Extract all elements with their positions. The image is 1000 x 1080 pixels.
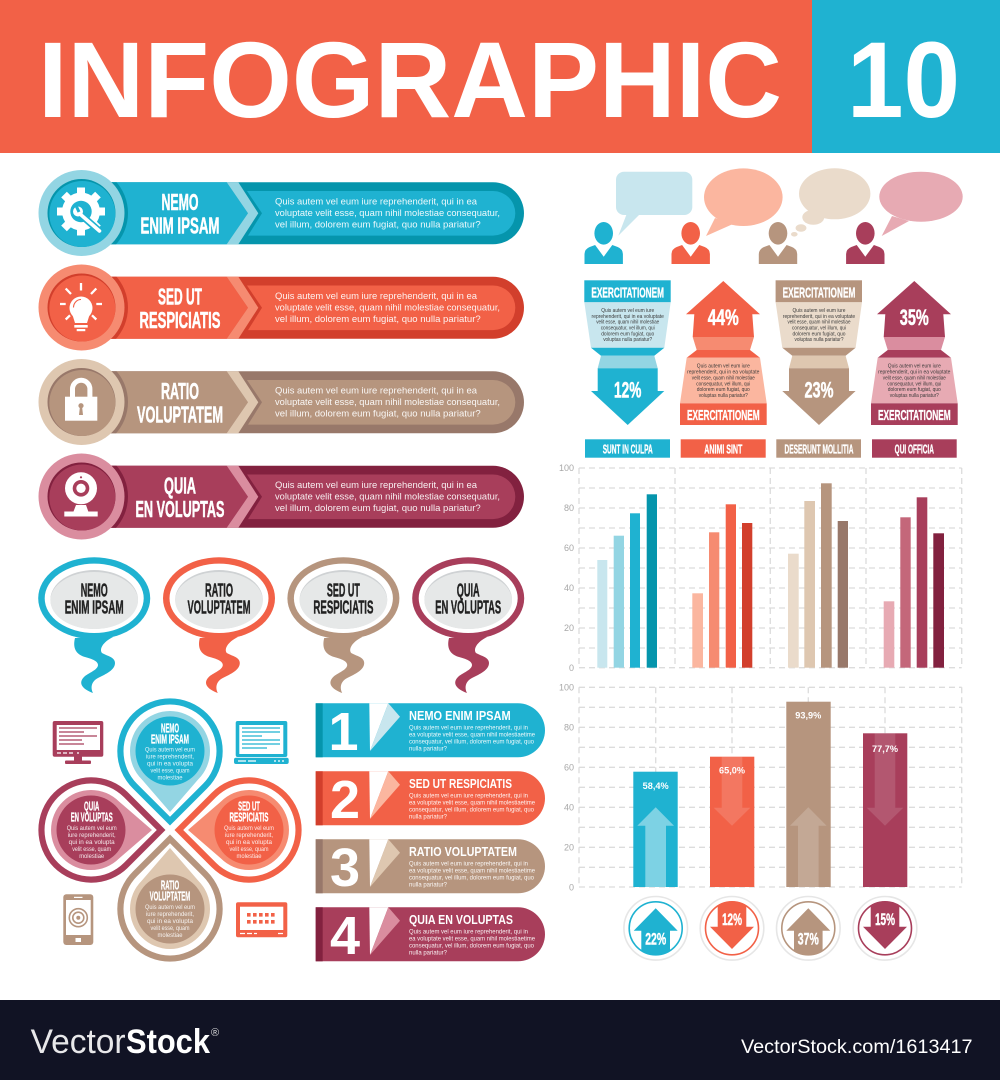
panel: funnel arrow teal 12%: voluptas nulla pariatur? [603,337,652,343]
panel: funnel arrow tan 23%: dolorem eum fugiat, quo [792,331,846,337]
bar chart: single bars with arrows: 20 [564,842,574,852]
panel: numbered ribbon 4: Quis autem vel eum iure reprehenderit, qui in [409,928,528,936]
panel: numbered ribbon 1: NEMO ENIM IPSAM [409,709,511,723]
panel: funnel arrow tan 23%: 23% [804,377,834,402]
callout: speech balloon quia en voluptas: QUIA [457,580,480,600]
panel: funnel arrow tan 23%: EXERCITATIONEM [783,285,855,301]
panel: numbered ribbon 2: nulla pariatur? [409,814,447,820]
panel: funnel arrow coral 44% [680,281,767,425]
panel: left drop quia en voluptas: velit esse, quam [72,846,111,853]
callout: speech balloon nemo enim ipsam: NEMO [81,580,108,600]
icon: badge up 22%: 22% [645,929,666,948]
number badge: 10: 10 [847,19,960,140]
callout: speech balloon ratio voluptatem: RATIO [205,580,233,600]
banner text [275,385,500,420]
banner heading: QUIA [164,472,196,498]
panel: bottom drop ratio voluptatem: velit esse, quam [150,925,190,932]
banner text: voluptate velit esse, quam nihil molestiae consequatur, [275,208,500,219]
title banner: INFOGRAPHIC [38,19,782,140]
panel: banner 1 nemo enim ipsam: ENIM IPSAM [140,212,220,238]
bar: 65,0%: 65,0% [719,766,745,776]
panel: numbered ribbon 4: nulla pariatur? [409,950,447,956]
icon: person tan with thought bubble [759,168,870,264]
bar chart: single bars with arrows: 60 [564,762,574,772]
footer bar: VectorStock.com/1613417 [741,1037,973,1058]
bar chart: grouped bars: 80 [564,503,574,513]
panel: banner 2 sed ut respiciatis: RESPICIATIS [140,307,220,333]
label: sunt in culpa: SUNT IN CULPA [603,442,653,456]
callout: speech balloon sed ut respiciatis: SED UT [327,580,360,600]
panel: numbered ribbon 3: Quis autem vel eum iure reprehenderit, qui in [409,860,528,868]
panel: numbered ribbon 1: Quis autem vel eum iure reprehenderit, qui in [409,724,528,732]
bar: 77,7%: 77,7% [872,744,898,754]
icon: badge down 15% [853,896,917,960]
panel: numbered ribbon 2 [316,770,545,830]
panel: banner 2 sed ut respiciatis [34,260,524,354]
banner text [275,196,500,231]
panel: banner 4 quia en voluptas: EN VOLUPTAS [136,496,224,522]
panel: funnel arrow coral 44%: dolorem eum fugiat, quo [697,387,750,393]
panel: right drop sed ut respiciatis: SED UT [238,800,260,814]
panel: funnel arrow plum 35%: voluptas nulla pariatur? [890,393,939,399]
panel: bottom drop ratio voluptatem [117,834,223,962]
banner text: Quis autem vel eum iure reprehenderit, qui in ea [275,291,478,302]
icon: laptop [234,721,289,764]
label: qui officia: QUI OFFICIA [895,442,934,456]
bar: 58,4%: 58,4% [643,781,669,791]
panel: banner 3 ratio voluptatem: VOLUPTATEM [137,401,223,427]
banner text: vel illum, dolorem eum fugiat, quo nulla pariatur? [275,220,481,231]
panel: right drop sed ut respiciatis: Quis autem vel eum [224,825,274,832]
panel: flower diagram [38,698,302,962]
panel: numbered ribbon 3: 3 [330,838,360,898]
panel: funnel arrow coral 44%: reprehenderit, qui in ea voluptate [687,370,759,376]
label: qui officia [872,439,957,458]
panel: numbered ribbon 2: SED UT RESPICIATIS [409,777,512,791]
panel: funnel arrow teal 12%: 12% [614,377,641,402]
footer bar: Vector [31,1023,126,1061]
panel: banner 4 quia en voluptas [34,450,524,544]
panel: funnel arrow plum 35%: velit esse, quam nihil molestiae [883,375,946,381]
panel: right drop sed ut respiciatis: velit esse, quam [230,846,268,853]
panel: left drop quia en voluptas: EN VOLUPTAS [71,811,113,825]
panel: top drop nemo enim ipsam: velit esse, quam [150,768,190,774]
panel: funnel arrow tan 23%: reprehenderit, qui in ea voluptate [783,314,855,320]
panel: left drop quia en voluptas: qui in ea volupta [69,839,115,846]
panel: top drop nemo enim ipsam: molestiae [158,774,183,782]
panel: right drop sed ut respiciatis: molestiae [236,853,262,860]
panel: numbered ribbon 2: 2 [330,770,360,830]
panel: bottom drop ratio voluptatem: VOLUPTATEM [150,890,190,904]
panel: numbered ribbon 1: consequatur, vel illum, dolorem eum fugiat, quo [409,738,534,746]
panel: funnel arrow tan 23%: consequatur, vel illum, qui [792,326,846,332]
panel: numbered ribbon 1: ea voluptate velit esse, quam nihil molestiaetime [409,732,535,738]
bar chart: grouped bars: 40 [564,583,574,593]
panel: numbered ribbon 4 [316,906,545,966]
icon: light bulb [60,283,102,331]
callout: speech balloon sed ut respiciatis: RESPICIATIS [313,598,373,618]
panel: funnel arrow tan 23%: voluptas nulla pariatur? [794,337,844,343]
panel: bottom drop ratio voluptatem: molestiae [158,932,183,939]
panel: top drop nemo enim ipsam: iure reprehenderit, [146,754,194,760]
panel: numbered ribbon 1: 1 [328,702,359,762]
callout: speech balloon nemo enim ipsam [38,557,150,693]
panel: numbered ribbon 2: Quis autem vel eum iure reprehenderit, qui in [409,792,528,800]
panel: right drop sed ut respiciatis: qui in ea volupta [226,839,273,846]
panel: top drop nemo enim ipsam: NEMO [161,721,179,735]
bar chart: grouped bars: 60 [564,543,574,553]
icon: person coral with oval speech bubble [672,168,783,264]
panel: funnel arrow plum 35%: dolorem eum fugiat, quo [888,387,941,393]
panel: funnel arrow tan 23%: Quis autem vel eum iure [792,308,846,314]
panel: numbered ribbon 3 [316,838,545,898]
icon: desktop monitor [53,721,103,764]
icon: person teal with rectangular speech bubble [584,172,692,264]
icon: badge down 12% [700,896,764,960]
banner text: voluptate velit esse, quam nihil molestiae consequatur, [275,397,500,408]
panel: funnel arrow tan 23% [776,280,862,425]
footer bar: Stock [126,1023,210,1061]
banner text: Quis autem vel eum iure reprehenderit, qui in ea [275,385,478,396]
panel: top drop nemo enim ipsam: Quis autem vel eum [145,746,195,754]
label: animi sint: ANIMI SINT [704,442,743,456]
banner text: voluptate velit esse, quam nihil molestiae consequatur, [275,302,500,314]
panel: right drop sed ut respiciatis: iure reprehenderit, [225,832,273,839]
label: deserunt mollitia [776,439,861,458]
panel: numbered ribbon 3: RATIO VOLUPTATEM [409,845,517,859]
panel: top drop nemo enim ipsam: qui in ea volupta [147,760,194,768]
bar chart: grouped bars: 0 [569,663,574,673]
panel: numbered ribbon 4: ea voluptate velit esse, quam nihil molestiaetime [409,936,535,942]
panel: numbered ribbon 1: nulla pariatur? [409,746,447,752]
panel: numbered ribbon 1 [316,702,545,762]
bar chart: single bars with arrows: 100 [559,682,574,692]
icon: webcam [64,472,98,516]
panel: bottom drop ratio voluptatem: qui in ea volupta [147,918,194,925]
panel: numbered ribbon 4: consequatur, vel illum, dolorem eum fugiat, quo [409,942,534,950]
panel: numbered ribbon 4: 4 [330,906,360,966]
bar: 58,4% [633,772,678,887]
callout: speech balloon ratio voluptatem [163,557,275,693]
panel: funnel arrow coral 44%: Quis autem vel eum iure [697,364,750,370]
panel: funnel arrow coral 44%: velit esse, quam nihil molestiae [692,375,755,381]
bar: 65,0% [710,757,754,887]
number badge: 10 [812,0,1000,153]
panel: top drop nemo enim ipsam [117,698,223,826]
bar chart: grouped bars: 100 [559,463,574,473]
panel: funnel arrow coral 44%: EXERCITATIONEM [687,408,760,424]
panel: funnel arrow coral 44%: 44% [708,305,739,330]
panel: numbered ribbon 3: ea voluptate velit esse, quam nihil molestiaetime [409,868,535,874]
panel: left drop quia en voluptas [38,777,166,883]
icon: person plum with oval speech bubble [846,172,963,264]
icon: badge down 12%: 12% [722,910,742,929]
banner text: vel illum, dolorem eum fugiat, quo nulla pariatur? [275,314,481,325]
panel: right drop sed ut respiciatis: RESPICIATIS [230,811,268,825]
footer bar: ® [211,1027,219,1039]
bar chart: single bars with arrows [559,682,962,892]
panel: funnel arrow plum 35%: 35% [900,305,929,330]
panel: right drop sed ut respiciatis [174,777,302,883]
banner text: Quis autem vel eum iure reprehenderit, qui in ea [275,196,478,207]
bar: 77,7% [863,733,907,887]
panel: funnel arrow teal 12%: consequatur, vel illum, qui [601,326,655,332]
callout: speech balloon quia en voluptas [412,557,524,693]
panel: numbered ribbon 4: QUIA EN VOLUPTAS [409,913,513,927]
icon: tablet [236,902,287,937]
panel: funnel arrow teal 12%: EXERCITATIONEM [591,285,664,301]
panel: funnel arrow teal 12%: reprehenderit, qui in ea voluptate [592,314,664,320]
bar: 93,9%: 93,9% [795,711,821,721]
bar chart: grouped bars: 20 [564,623,574,633]
banner text: Quis autem vel eum iure reprehenderit, qui in ea [275,480,478,491]
panel: left drop quia en voluptas: QUIA [84,800,99,814]
callout: speech balloon sed ut respiciatis [287,557,399,693]
panel: numbered ribbon 3: nulla pariatur? [409,882,447,888]
panel: funnel arrow tan 23%: velit esse, quam nihil molestiae [788,320,850,326]
label: sunt in culpa [585,439,670,458]
bar chart: single bars with arrows: 0 [569,882,574,892]
icon: badge down 15%: 15% [875,910,895,929]
bar chart: single bars with arrows: 80 [564,722,574,732]
banner text: vel illum, dolorem eum fugiat, quo nulla pariatur? [275,503,481,514]
panel: numbered ribbon 2: consequatur, vel illum, dolorem eum fugiat, quo [409,806,534,814]
banner heading: RATIO [161,378,199,404]
panel: funnel arrow teal 12%: dolorem eum fugiat, quo [601,331,654,337]
panel: top drop nemo enim ipsam: ENIM IPSAM [151,732,189,746]
panel: funnel arrow coral 44%: consequatur, vel illum, qui [696,381,750,387]
banner heading: SED UT [158,284,202,310]
panel: bottom drop ratio voluptatem: iure reprehenderit, [146,911,194,918]
panel: left drop quia en voluptas: iure reprehenderit, [68,832,116,839]
banner text [275,291,500,325]
panel: funnel arrow plum 35% [871,281,958,425]
panel: funnel arrow plum 35%: Quis autem vel eum iure [888,364,941,370]
footer bar [0,1000,1000,1080]
icon: badge up 37%: 37% [798,929,819,948]
label: deserunt mollitia: DESERUNT MOLLITIA [784,442,854,456]
panel: funnel arrow teal 12%: velit esse, quam nihil molestiae [596,320,659,326]
icon: smartphone [63,894,93,945]
label: animi sint [681,439,766,458]
banner text [275,480,500,514]
bar chart: grouped bars [559,463,962,673]
panel: banner 1 nemo enim ipsam [34,166,524,260]
banner text: vel illum, dolorem eum fugiat, quo nulla pariatur? [275,409,481,420]
panel: bottom drop ratio voluptatem: Quis autem vel eum [145,904,195,911]
callout: speech balloon nemo enim ipsam: ENIM IPSAM [65,598,124,618]
panel: numbered ribbon 2: ea voluptate velit esse, quam nihil molestiaetime [409,800,535,806]
bar: 93,9% [786,702,831,887]
panel: funnel arrow teal 12%: Quis autem vel eum iure [601,308,654,314]
panel: funnel arrow coral 44%: voluptas nulla pariatur? [699,393,748,399]
panel: bottom drop ratio voluptatem: RATIO [161,878,179,892]
icon: badge up 22% [624,896,688,960]
panel: funnel arrow plum 35%: consequatur, vel illum, qui [887,381,941,387]
icon: badge up 37% [776,896,840,960]
callout: speech balloon quia en voluptas: EN VOLUPTAS [435,598,501,618]
icon: gear and wrench [57,188,105,236]
banner text: voluptate velit esse, quam nihil molestiae consequatur, [275,492,500,502]
panel: left drop quia en voluptas: molestiae [79,853,105,860]
bar chart: single bars with arrows: 40 [564,802,574,812]
panel: numbered ribbon 3: consequatur, vel illum, dolorem eum fugiat, quo [409,874,534,882]
panel: funnel arrow teal 12% [584,280,671,425]
callout: speech balloon ratio voluptatem: VOLUPTATEM [188,598,250,618]
icon: padlock [65,380,97,421]
panel: banner 3 ratio voluptatem [34,355,524,449]
panel: funnel arrow plum 35%: reprehenderit, qui in ea voluptate [878,370,950,376]
panel: left drop quia en voluptas: Quis autem vel eum [67,825,117,832]
banner heading: NEMO [162,189,198,215]
